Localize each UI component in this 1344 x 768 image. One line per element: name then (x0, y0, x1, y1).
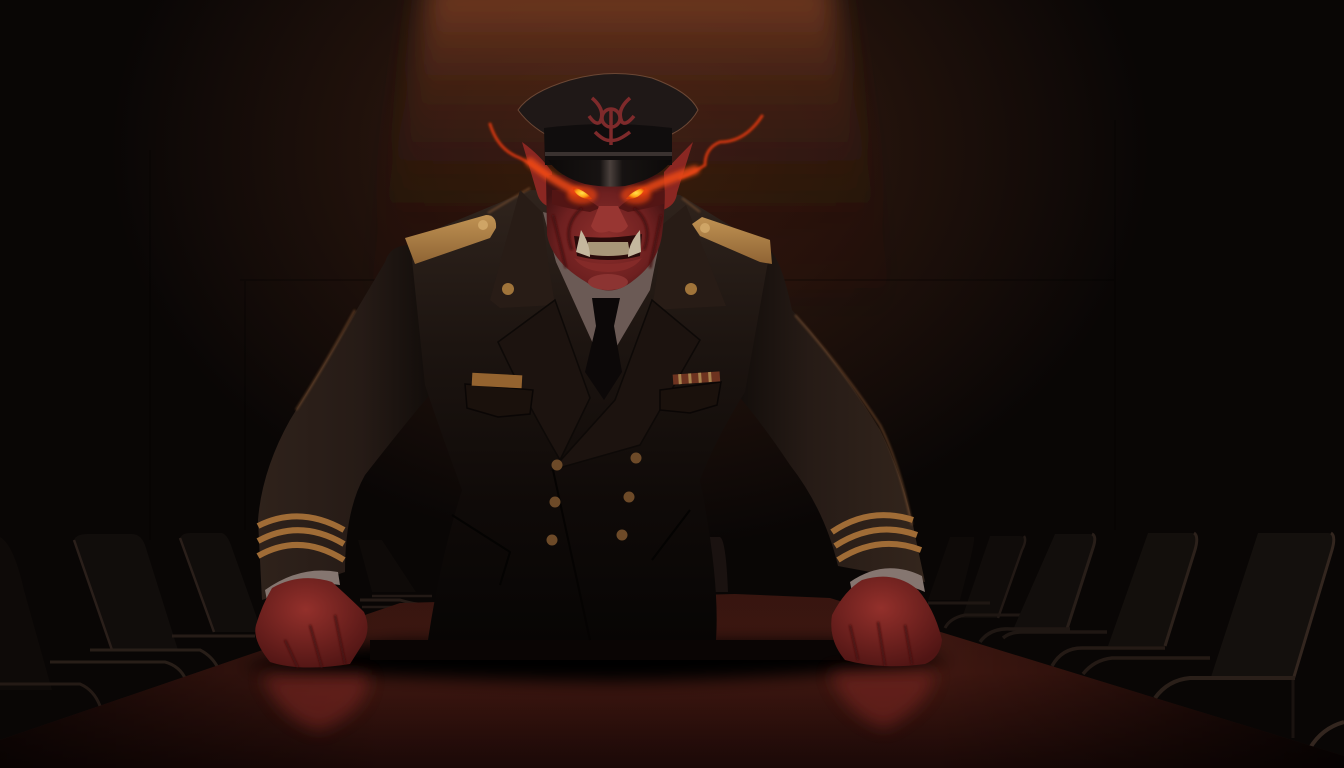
face: nose (591, 206, 628, 233)
officer: right shirt cuff (850, 568, 925, 592)
cap: crown (518, 73, 698, 134)
officer: lower jacket pockets (452, 510, 690, 585)
officer: brass buttons (546, 452, 642, 546)
chair: fifth right (928, 537, 974, 600)
officer: right arm (735, 250, 925, 582)
officer: right ear (663, 142, 693, 210)
chairs: right row (688, 533, 1344, 748)
officer: left cuff stripes (258, 516, 344, 560)
officer: torso jacket (410, 190, 770, 640)
officer: name plate (472, 373, 522, 388)
face: brows (552, 190, 664, 212)
face: lower lip (574, 258, 642, 272)
face: left fang (576, 230, 590, 257)
officer: shirt and collar (543, 212, 660, 368)
officer: left ear (522, 142, 553, 208)
face: cheek folds (553, 208, 661, 268)
officer: collar flaps (490, 190, 726, 310)
table: fist reflections (262, 672, 935, 730)
officer: right cuff stripes (832, 515, 921, 560)
chair: third right (980, 534, 1107, 642)
chair: third left (172, 533, 418, 636)
officer: double-breasted front seam (553, 470, 590, 640)
chair: nearest right (1155, 533, 1344, 748)
officer: left shirt cuff (265, 570, 340, 606)
officer (255, 73, 942, 668)
chair: second right (1052, 533, 1210, 674)
table: shadow under the officer (240, 642, 950, 682)
chair: fourth right (928, 536, 1025, 628)
officer: right breast pocket (660, 382, 721, 413)
officer: left fist (255, 578, 368, 668)
officer: right fist (831, 577, 942, 666)
officer: collar pins (502, 283, 697, 295)
chair: far left (0, 537, 100, 706)
officer: medal ribbons (673, 371, 720, 385)
officer: demon head (546, 175, 665, 291)
officer: necktie (585, 298, 622, 400)
face: right fang (628, 230, 641, 257)
face: teeth (586, 242, 630, 256)
officer: left epaulet (405, 215, 496, 264)
face: snarling mouth (574, 234, 642, 260)
chair: second left (50, 534, 218, 680)
officer: left arm (258, 245, 432, 600)
chairs: left row (0, 533, 432, 706)
officer: flames from the eyes (490, 116, 762, 192)
cap: visor (548, 160, 672, 187)
officer: left breast pocket (465, 384, 533, 417)
officer: lapels (498, 300, 700, 470)
officer: right epaulet (692, 217, 772, 264)
face: chin (588, 274, 628, 290)
officer: peaked cap (518, 73, 698, 187)
officer: shoulder rim light (296, 188, 912, 525)
officer: glowing eyes (567, 186, 651, 204)
cap: emblem (589, 98, 634, 145)
cap: chin strap (545, 152, 672, 156)
cap: band (544, 124, 672, 165)
boardroom table (0, 594, 1344, 768)
chair: fourth left (358, 540, 432, 607)
chair: far end behind officer (688, 537, 728, 592)
